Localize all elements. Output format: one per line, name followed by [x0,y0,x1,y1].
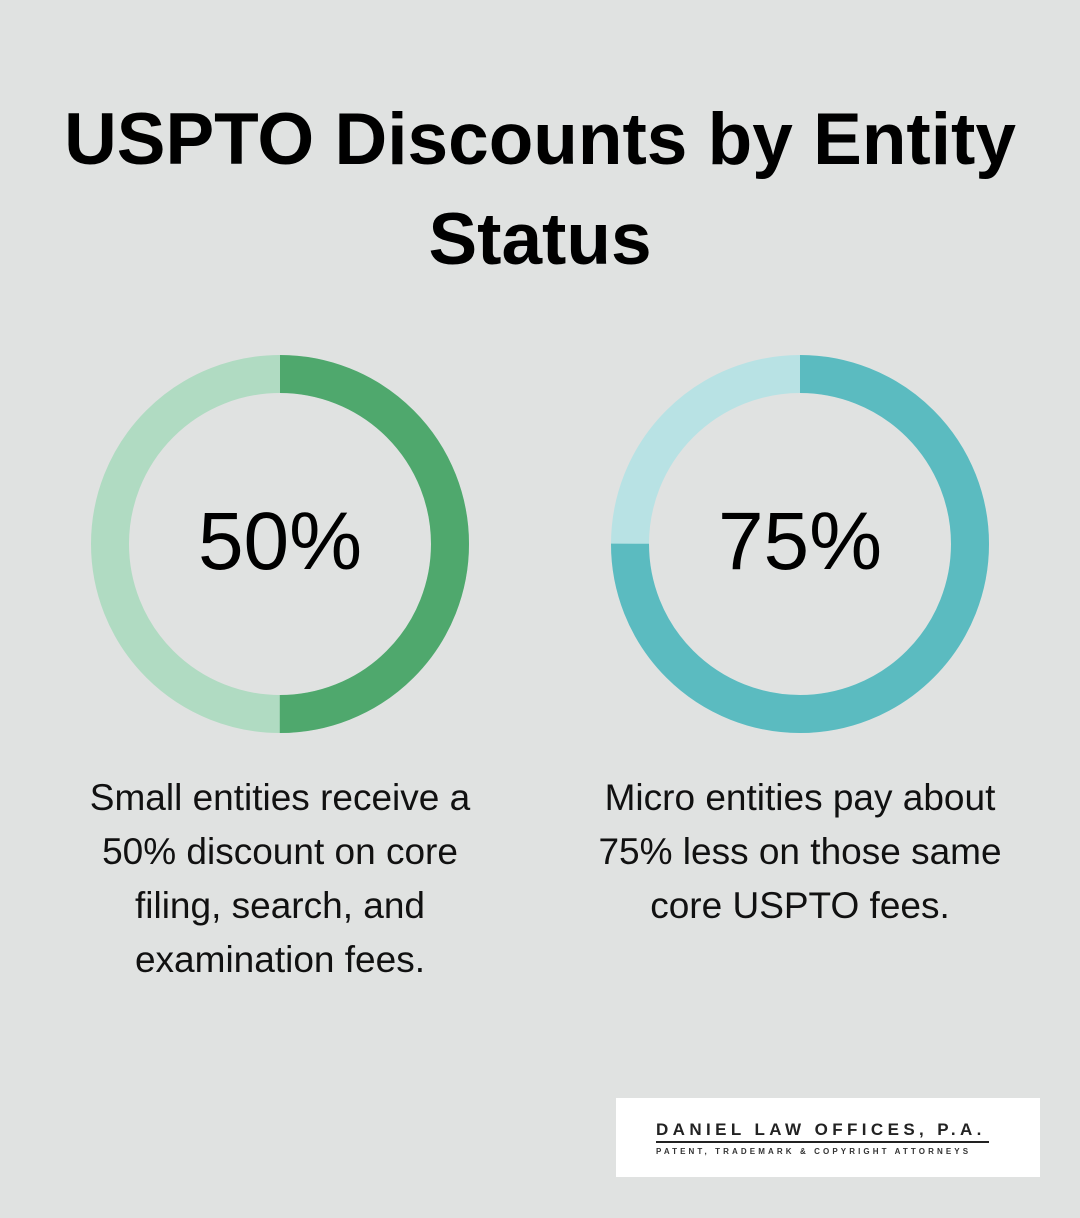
logo [616,1098,1040,1177]
logo: DANIEL LAW OFFICES, P.A. [656,1120,986,1139]
title: USPTO Discounts by Entity [64,99,1016,180]
caption: small entities: Small entities receive a 50% discount on core filing, search, and examination fees. [90,777,470,980]
donut: 75% [611,355,989,733]
caption: micro entities: Micro entities pay about 75% less on those same core USPTO fees. [598,777,1002,926]
donut: 50%: 50% [198,496,362,587]
logo: PATENT, TRADEMARK & COPYRIGHT ATTORNEYS [656,1147,971,1156]
title: Status [428,199,652,280]
title [64,99,1016,280]
donut: 50% [91,355,469,733]
donut: 75%: 75% [718,496,882,587]
